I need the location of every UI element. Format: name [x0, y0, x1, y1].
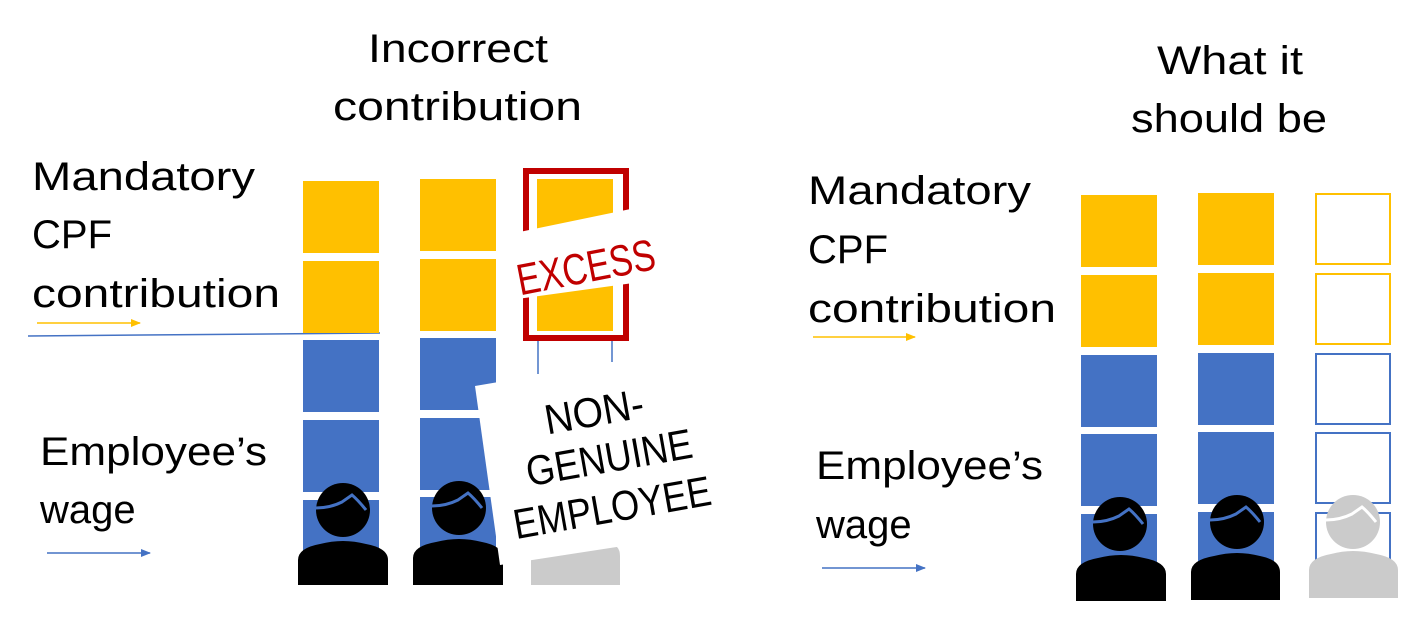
column: employee 2 incorrect	[413, 179, 503, 585]
icon: gray person	[1309, 495, 1398, 598]
label: employee's wage (right): Employee’s	[816, 444, 1043, 488]
label: mandatory CPF contribution (right): Mandatory	[808, 169, 1031, 213]
column: employee 2 correct	[1191, 193, 1280, 600]
title: incorrect contribution: Incorrect	[368, 27, 548, 71]
label: employee's wage (left): Employee’s	[40, 430, 267, 474]
icon: person	[1076, 497, 1166, 601]
gray non-genuine person base	[531, 544, 620, 585]
divider line: wage / contribution boundary	[28, 333, 380, 336]
icon: person	[413, 481, 503, 585]
column: no contribution (outlined)	[1309, 194, 1398, 598]
arrow: yellow right	[813, 336, 915, 338]
column: employee 1 correct	[1076, 195, 1166, 601]
sign: non-genuine employee: GENUINE	[522, 420, 696, 495]
label: mandatory CPF contribution (left)	[32, 155, 280, 316]
title: what it should be	[1131, 39, 1327, 141]
label: mandatory CPF contribution (right): CPF	[808, 228, 888, 272]
icon: person	[1191, 495, 1280, 600]
arrow: yellow left	[37, 322, 140, 324]
label: mandatory CPF contribution (right)	[808, 169, 1056, 331]
sign: non-genuine employee: EMPLOYEE	[510, 467, 715, 548]
label: EXCESS: EXCESS	[513, 230, 659, 305]
title: what it should be: should be	[1131, 97, 1327, 141]
icon: person	[298, 483, 388, 585]
label: employee's wage (left)	[39, 430, 267, 532]
title: incorrect contribution: contribution	[333, 85, 582, 129]
arrow: blue left	[47, 552, 150, 554]
label: EXCESS	[505, 205, 659, 305]
label: employee's wage (left): wage	[39, 488, 136, 532]
label: mandatory CPF contribution (left): CPF	[32, 213, 112, 257]
sign: non-genuine employee: NON-	[541, 380, 647, 443]
title: what it should be: What it	[1157, 39, 1303, 83]
label: mandatory CPF contribution (left): Mandatory	[32, 155, 255, 199]
label: employee's wage (right)	[815, 444, 1043, 547]
sign: non-genuine employee	[475, 358, 715, 565]
excess column with red box	[505, 171, 659, 374]
column: employee 1 incorrect	[298, 181, 388, 585]
label: employee's wage (right): wage	[815, 503, 912, 547]
arrow: blue right	[822, 567, 925, 569]
label: mandatory CPF contribution (right): contribution	[808, 287, 1056, 331]
title: incorrect contribution	[333, 27, 582, 129]
label: mandatory CPF contribution (left): contribution	[32, 272, 280, 316]
